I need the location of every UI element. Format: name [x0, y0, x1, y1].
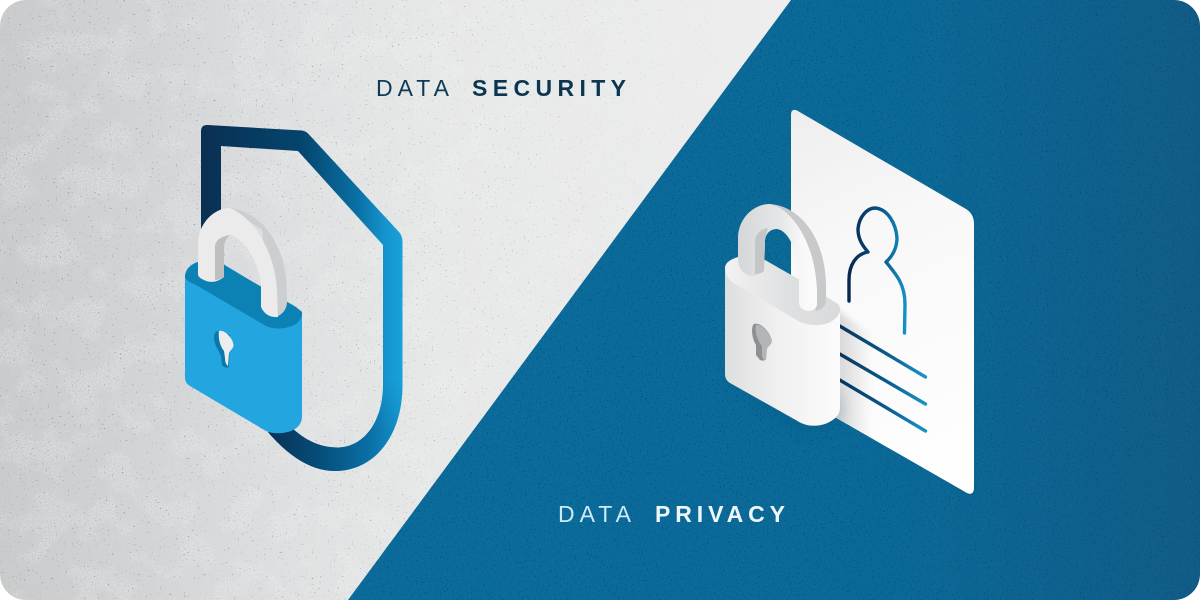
keyhole [214, 331, 234, 368]
padlock top face [725, 257, 840, 325]
padlock body [185, 261, 302, 433]
padlock body [725, 260, 840, 426]
icon: shield outline behind blue padlock [201, 125, 402, 471]
keyhole [752, 324, 772, 361]
shackle [738, 204, 826, 311]
text lines [838, 325, 926, 431]
icon: blue padlock [185, 208, 302, 433]
panel: data privacy background [348, 0, 1200, 600]
heading: data privacy: DATA [558, 501, 632, 527]
icon: white padlock [725, 204, 840, 428]
heading: data security: SECURITY [472, 75, 626, 101]
shackle [198, 208, 287, 317]
heading: data security: DATA [376, 75, 450, 101]
panel: data security background [0, 0, 791, 600]
heading: data privacy: PRIVACY [655, 501, 785, 527]
icon: personal data document [791, 110, 974, 494]
padlock top face [185, 261, 302, 328]
lock shadow on document [836, 310, 864, 434]
person outline [849, 208, 905, 333]
heading: data privacy [560, 506, 785, 522]
heading: data security [378, 80, 626, 96]
padlock shadow [836, 389, 849, 422]
